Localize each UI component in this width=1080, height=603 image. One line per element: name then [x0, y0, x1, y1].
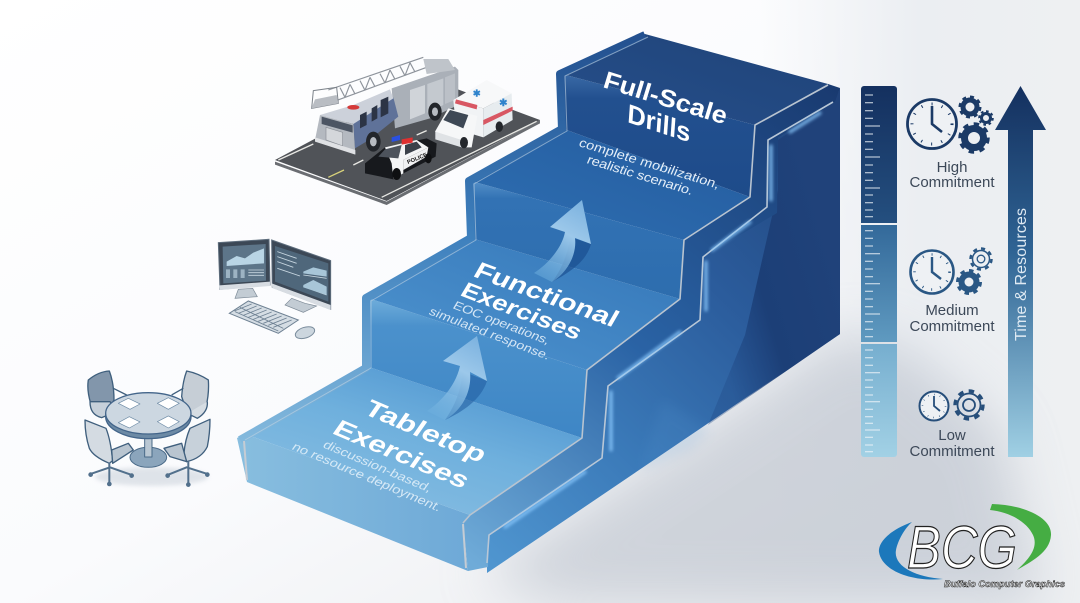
table base — [130, 435, 167, 467]
heading line: Drills: Drills — [627, 98, 691, 148]
front face of first step — [237, 434, 470, 571]
logo tagline: Buffalo Computer Graphics — [944, 579, 1065, 590]
side glow highlights — [505, 113, 820, 527]
label: high commitment: High — [937, 159, 967, 176]
commitment ruler — [861, 86, 897, 457]
arrow between steps one and two — [427, 336, 487, 420]
top tread — [562, 34, 828, 125]
heading line: Exercises: Exercises — [328, 415, 475, 493]
police car: POLICE — [406, 152, 428, 166]
arrow: time and resources — [995, 86, 1046, 457]
step three tread — [471, 129, 750, 240]
label: low commitment: Low — [938, 427, 966, 444]
police car — [365, 135, 437, 180]
ruler segment: low — [861, 344, 897, 457]
keyboard — [229, 301, 298, 333]
logo green swoosh — [990, 504, 1051, 570]
icon: high commitment clock and gears — [908, 97, 993, 152]
icon: medium commitment clock and gears — [910, 248, 992, 294]
heading: Functional: Functional — [469, 257, 624, 332]
heading: Tabletop: Tabletop — [359, 395, 493, 467]
label: high commitment: Commitment — [909, 174, 995, 191]
step three riser — [471, 181, 684, 299]
emergency vehicles on road — [275, 57, 540, 205]
ruler segment: medium — [861, 225, 897, 342]
table top — [106, 393, 191, 439]
fire truck — [312, 57, 458, 155]
text: no resource deployment: no resource deployment. — [289, 440, 445, 514]
left monitor — [218, 239, 270, 298]
text: realistic scenario: realistic scenario. — [585, 153, 696, 198]
ambulance — [435, 80, 513, 148]
text: simulated response: simulated response. — [427, 304, 553, 362]
left front silver corner — [244, 441, 466, 568]
right silver trim — [463, 85, 828, 523]
text: EOC operations: EOC operations, — [451, 298, 553, 347]
back chairs — [88, 371, 209, 418]
ruler segment: high — [861, 86, 897, 223]
road base — [275, 78, 540, 205]
icon: low commitment clock and gear — [920, 391, 983, 420]
label: low commitment: Commitment — [909, 443, 995, 460]
step two riser — [366, 298, 587, 438]
step two tread — [368, 238, 680, 370]
text: discussion-based: discussion-based, — [320, 438, 435, 495]
computer workstation — [218, 239, 331, 341]
logo: Buffalo Computer Graphics — [879, 504, 1065, 590]
side silver trim — [487, 102, 833, 563]
label: medium commitment: Commitment — [909, 318, 995, 335]
text: complete mobilization: complete mobilization, — [577, 136, 722, 191]
side face of staircase — [487, 88, 840, 573]
right monitor — [272, 240, 331, 312]
ambulance: ✱ — [499, 98, 508, 109]
left outer edge — [240, 35, 645, 440]
logo letters: BCG — [907, 514, 1017, 581]
arrow label: Time & Resources — [1013, 208, 1030, 341]
right bevel strip — [463, 84, 840, 571]
heading line: Exercises: Exercises — [456, 279, 586, 345]
front chairs — [85, 419, 210, 487]
top riser — [562, 74, 755, 197]
conference table and chairs — [85, 371, 210, 487]
ambulance: ✱ — [473, 89, 481, 99]
ruler ticks — [865, 95, 880, 452]
logo blue swoosh — [879, 522, 943, 580]
mouse — [294, 324, 316, 341]
step one tread — [245, 366, 582, 515]
staircase — [237, 34, 840, 573]
arrow between steps two and three — [534, 200, 591, 282]
left silver trim — [245, 37, 648, 440]
heading: Full-Scale Drills: Full-Scale — [600, 67, 730, 130]
label: medium commitment: Medium — [925, 302, 979, 319]
